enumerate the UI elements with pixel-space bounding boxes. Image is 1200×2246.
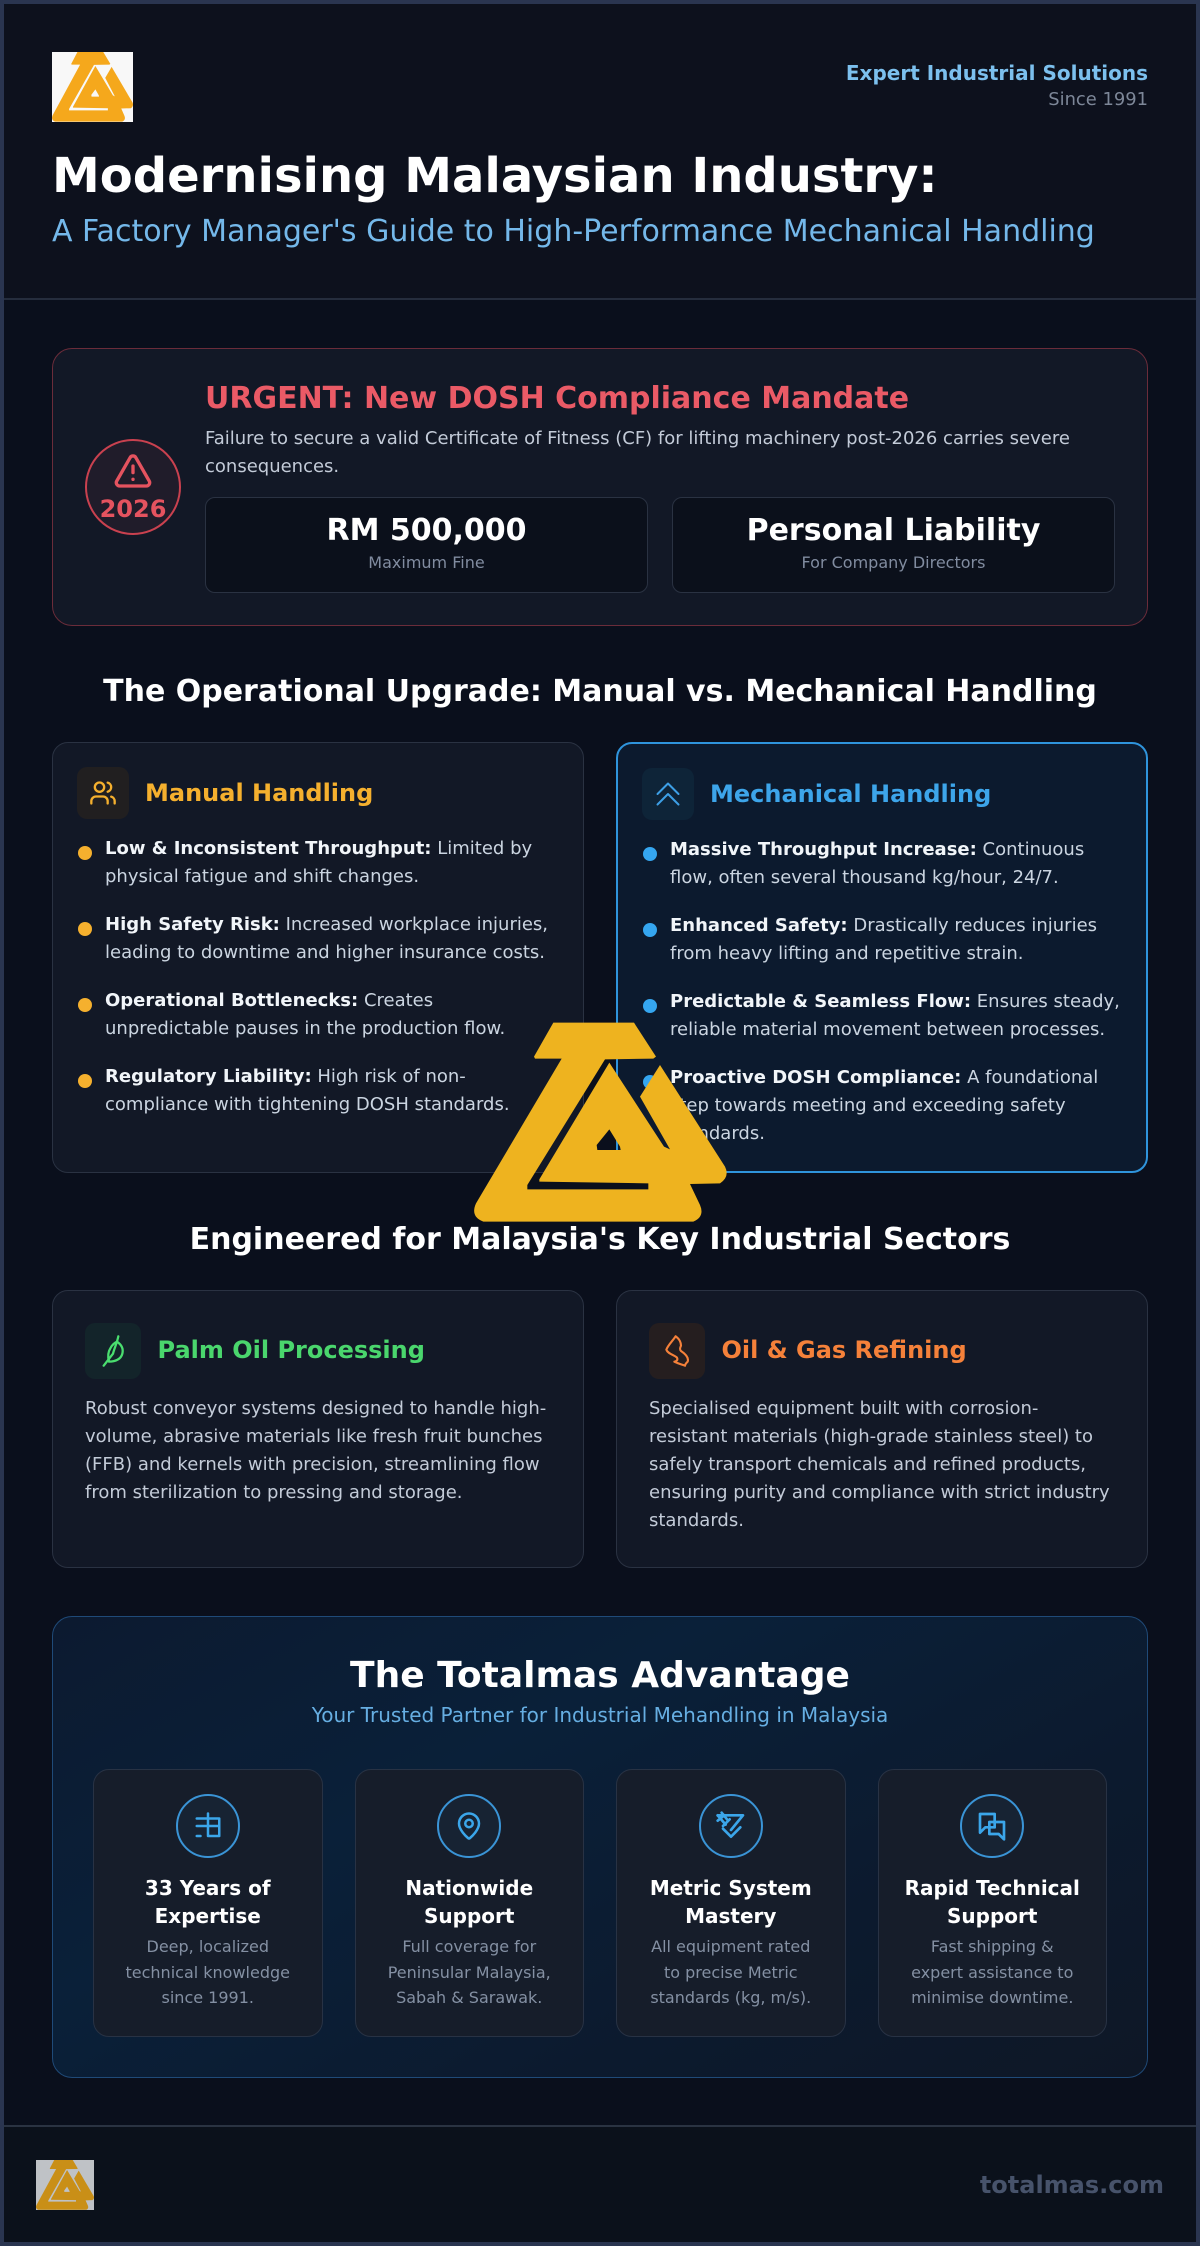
icon: people <box>77 767 129 819</box>
footer band <box>0 2125 1200 2246</box>
alert text: consequences. <box>205 456 339 477</box>
feature text: All equipment rated <box>651 1937 810 1956</box>
feature text: to precise Metric <box>664 1963 798 1982</box>
header band <box>0 0 1200 300</box>
feature: expertise <box>93 1769 322 2037</box>
panel: manual handling: unpredictable pauses in the production flow. <box>105 1018 505 1039</box>
stat: liability: For Company Directors <box>802 553 985 572</box>
panel: mechanical handling: Enhanced Safety: Drastically reduces injuries <box>670 915 1097 936</box>
feature text: Sabah & Sarawak. <box>396 1988 542 2007</box>
feature title: Rapid Technical <box>905 1876 1080 1900</box>
list item <box>643 1075 657 1089</box>
heading: sectors: Engineered for Malaysia's Key Industrial Sectors <box>190 1222 1010 1257</box>
feature title: Mastery <box>685 1904 776 1928</box>
tagline: Since 1991 <box>1048 89 1148 110</box>
feature title: Expertise <box>155 1904 261 1928</box>
feature: support <box>878 1769 1107 2037</box>
list item <box>78 1074 92 1088</box>
card text: Specialised equipment built with corrosion- <box>649 1398 1038 1419</box>
feature text <box>126 1937 290 2007</box>
footer logo <box>36 2160 94 2210</box>
list item <box>643 847 657 861</box>
advantage heading: The Totalmas Advantage <box>350 1655 850 1696</box>
stat: fine: RM 500,000 <box>326 513 527 548</box>
icon: ruler check <box>699 1794 763 1858</box>
feature title <box>905 1876 1080 1928</box>
list item <box>78 846 92 860</box>
panel: mechanical handling: Predictable & Seamless Flow: Ensures steady, <box>670 991 1120 1012</box>
panel: manual handling <box>52 742 584 1173</box>
card text: ensuring purity and compliance with strict industry <box>649 1482 1110 1503</box>
panel: manual handling: Regulatory Liability: High risk of non- <box>105 1066 466 1087</box>
feature text: Fast shipping & <box>931 1937 1054 1956</box>
feature: coverage <box>354 1769 584 2037</box>
feature title: Metric System <box>650 1876 812 1900</box>
tagline <box>846 61 1148 110</box>
title: Modernising Malaysian Industry: <box>52 148 938 204</box>
panel: mechanical handling: flow, often several thousand kg/hour, 24/7. <box>670 867 1059 888</box>
card text: volume, abrasive materials like fresh fruit bunches <box>85 1426 542 1447</box>
icon: chevrons up <box>642 768 694 820</box>
feature text <box>911 1937 1073 2007</box>
panel: manual handling: High Safety Risk: Increased workplace injuries, <box>105 914 548 935</box>
panel: mechanical handling: standards. <box>670 1123 765 1144</box>
panel: manual handling: leading to downtime and higher insurance costs. <box>105 942 545 963</box>
badge year: 2026 <box>100 495 166 523</box>
subtitle: A Factory Manager's Guide to High-Performance Mechanical Handling <box>52 214 1095 249</box>
card title: Mechanical Handling <box>710 780 991 808</box>
stat: liability: Personal Liability <box>747 513 1040 548</box>
list item <box>643 999 657 1013</box>
feature title: Support <box>947 1904 1037 1928</box>
icon: flame <box>649 1323 705 1379</box>
panel: palm oil <box>52 1290 584 1568</box>
list item <box>78 922 92 936</box>
card title: Palm Oil Processing <box>158 1336 425 1364</box>
feature title: 33 Years of <box>145 1876 271 1900</box>
footer website: totalmas.com <box>980 2171 1164 2199</box>
stat: liability <box>672 497 1115 593</box>
panel: mechanical handling <box>616 742 1148 1173</box>
card title: Manual Handling <box>145 779 373 807</box>
large overlaid logo <box>474 1022 727 1222</box>
icon: leaf <box>85 1323 141 1379</box>
panel: manual handling: physical fatigue and shift changes. <box>105 866 419 887</box>
card text: from sterilization to pressing and storage. <box>85 1482 462 1503</box>
card text: resistant materials (high-grade stainless steel) to <box>649 1426 1093 1447</box>
card text: standards. <box>649 1510 744 1531</box>
icon: warning triangle <box>114 454 152 488</box>
feature text: technical knowledge <box>126 1963 290 1982</box>
stat: fine <box>205 497 648 593</box>
list item <box>78 998 92 1012</box>
panel: manual handling: Low & Inconsistent Throughput: Limited by <box>105 838 532 859</box>
card text: Robust conveyor systems designed to handle high- <box>85 1398 546 1419</box>
alert badge 2026 <box>85 439 181 535</box>
company logo <box>52 52 133 122</box>
stat: fine: Maximum Fine <box>368 553 485 572</box>
feature text: minimise downtime. <box>911 1988 1073 2007</box>
feature text: Peninsular Malaysia, <box>388 1963 551 1982</box>
feature title <box>405 1876 533 1928</box>
feature title: Support <box>424 1904 514 1928</box>
feature title <box>145 1876 271 1928</box>
feature text: since 1991. <box>162 1988 254 2007</box>
card text <box>649 1398 1110 1531</box>
card text <box>85 1398 546 1503</box>
list item <box>643 923 657 937</box>
alert text <box>205 428 1070 477</box>
feature: metric <box>616 1769 846 2037</box>
feature title: Nationwide <box>405 1876 533 1900</box>
feature text: Full coverage for <box>402 1937 536 1956</box>
feature text: expert assistance to <box>911 1963 1073 1982</box>
card text: safely transport chemicals and refined products, <box>649 1454 1086 1475</box>
panel: mechanical handling: from heavy lifting and repetitive strain. <box>670 943 1024 964</box>
card title: Oil & Gas Refining <box>722 1336 967 1364</box>
panel: mechanical handling: Massive Throughput Increase: Continuous <box>670 839 1084 860</box>
icon: map pin <box>437 1794 501 1858</box>
panel: mechanical handling: reliable material movement between processes. <box>670 1019 1105 1040</box>
panel: manual handling: Operational Bottlenecks: Creates <box>105 990 433 1011</box>
feature text: Deep, localized <box>147 1937 269 1956</box>
tagline: Expert Industrial Solutions <box>846 61 1148 85</box>
alert text: Failure to secure a valid Certificate of Fitness (CF) for lifting machinery post-2026 carries severe <box>205 428 1070 449</box>
panel: DOSH alert <box>52 348 1148 626</box>
panel: mechanical handling: step towards meeting and exceeding safety <box>670 1095 1066 1116</box>
icon: building <box>176 1794 240 1858</box>
panel: manual handling: compliance with tightening DOSH standards. <box>105 1094 510 1115</box>
feature text: standards (kg, m/s). <box>650 1988 811 2007</box>
heading: operational upgrade: The Operational Upgrade: Manual vs. Mechanical Handling <box>103 674 1097 709</box>
card text: (FFB) and kernels with precision, streamlining flow <box>85 1454 540 1475</box>
panel: Totalmas advantage <box>52 1616 1148 2078</box>
icon: chat bubbles <box>960 1794 1024 1858</box>
panel: mechanical handling: Proactive DOSH Compliance: A foundational <box>670 1067 1098 1088</box>
feature text <box>650 1937 811 2007</box>
advantage subheading: Your Trusted Partner for Industrial Mehandling in Malaysia <box>312 1703 888 1727</box>
feature text <box>388 1937 551 2007</box>
feature title <box>650 1876 812 1928</box>
alert heading: URGENT: New DOSH Compliance Mandate <box>205 381 909 416</box>
panel: oil and gas <box>616 1290 1148 1568</box>
